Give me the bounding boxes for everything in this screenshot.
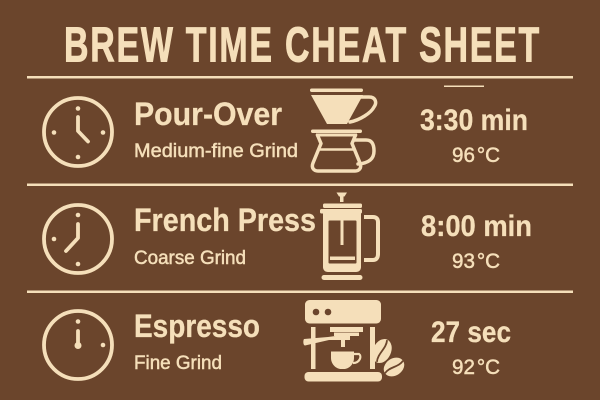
icon: pour-over dripper and carafe	[310, 88, 376, 171]
icon: clock showing 4:00	[44, 98, 112, 166]
panel: pour-over row	[44, 88, 528, 171]
heading: espresso: Espresso	[134, 308, 260, 344]
heading: french press: French Press	[134, 202, 316, 238]
icon: espresso machine with beans	[303, 300, 408, 382]
stat: espresso time: 27 sec	[431, 316, 511, 349]
text: medium-fine grind: Medium-fine Grind	[134, 140, 298, 162]
icon: french press	[320, 192, 378, 280]
text: fine grind: Fine Grind	[134, 352, 222, 374]
stat: espresso temperature: 92°C	[452, 356, 500, 379]
icon: clock showing 12:00	[44, 311, 112, 379]
panel: espresso row	[44, 300, 511, 382]
stat: pour-over time: 3:30 min	[420, 104, 528, 137]
heading: pour-over: Pour-Over	[134, 96, 282, 132]
icon: clock showing 7:00	[44, 205, 112, 273]
stat: french press temperature: 93°C	[452, 250, 500, 273]
text: coarse grind: Coarse Grind	[134, 247, 246, 269]
stat: french press time: 8:00 min	[421, 210, 532, 243]
panel: french press row	[44, 192, 532, 280]
stat: pour-over temperature: 96°C	[452, 144, 500, 167]
